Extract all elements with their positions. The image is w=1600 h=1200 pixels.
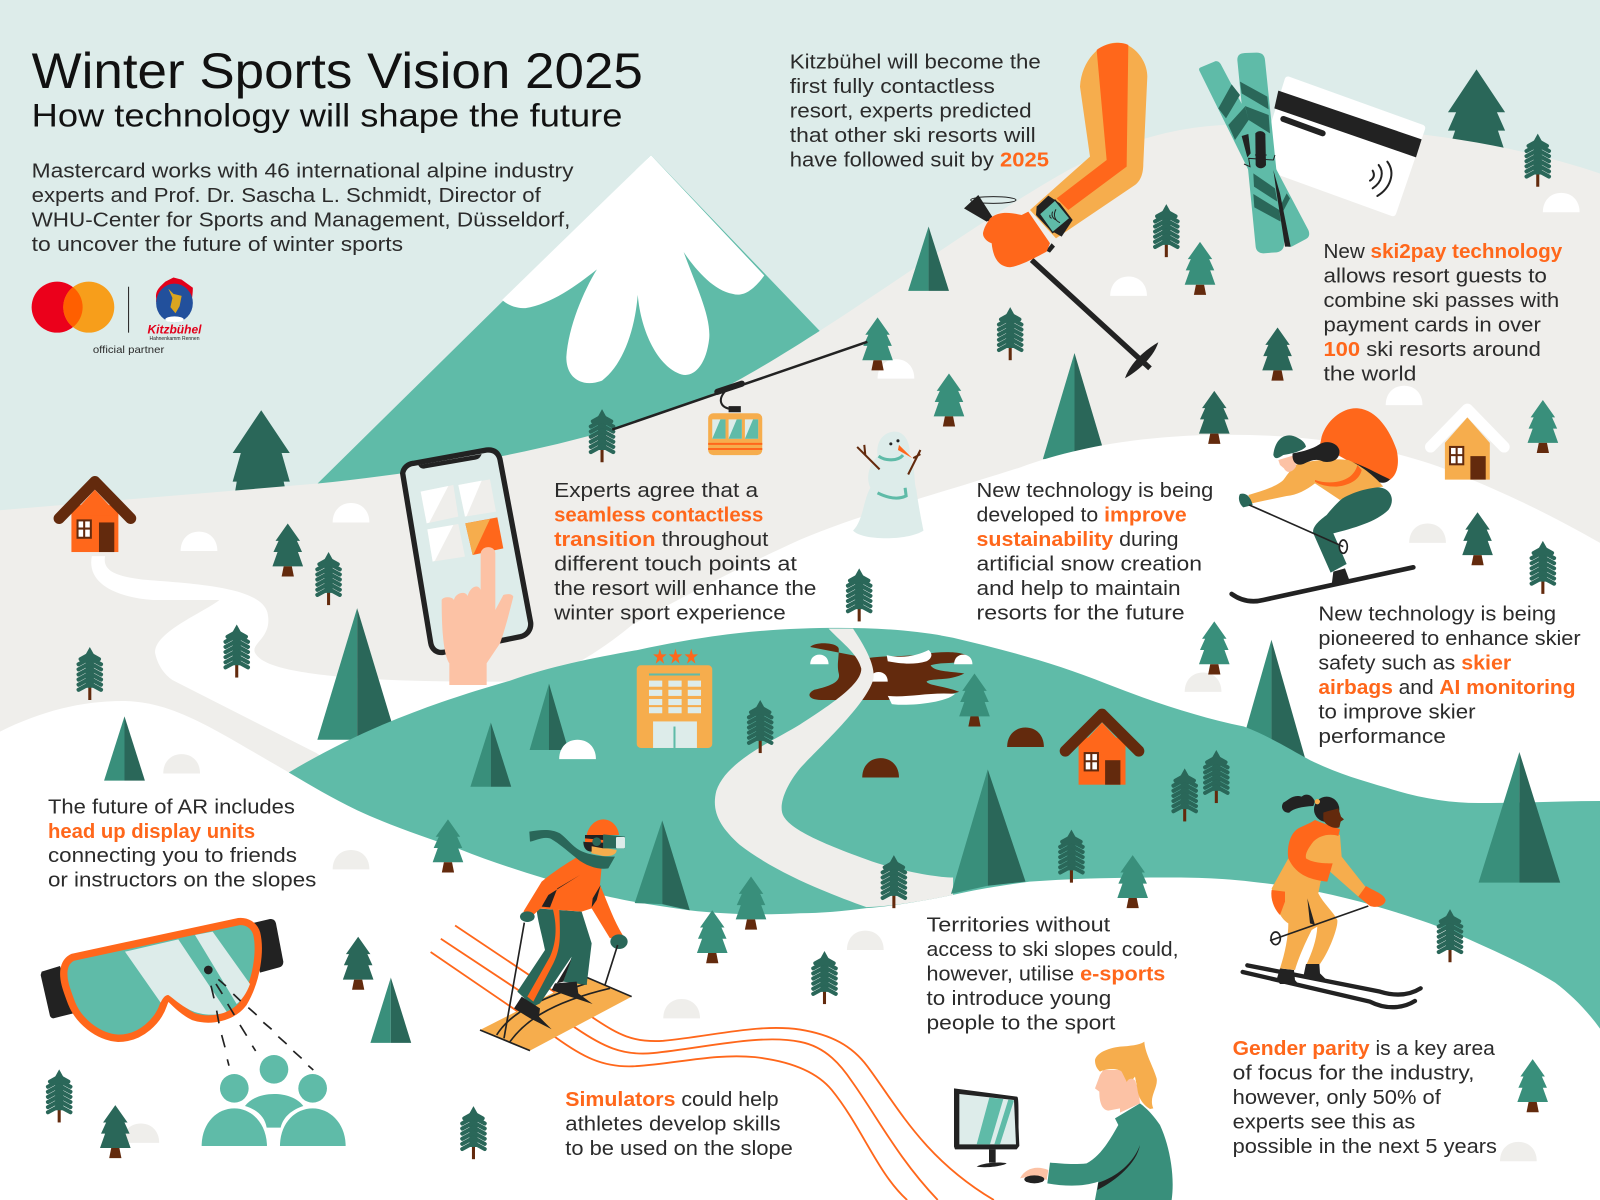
pine tree: [79, 647, 101, 700]
fir tree: [697, 910, 728, 963]
crossed skis: [1199, 53, 1309, 253]
snow mound: [878, 359, 914, 379]
text: e-sports: [927, 915, 1179, 1035]
text: simulators: Simulators could help: [565, 1089, 779, 1111]
large dark fir behind hill: [233, 410, 290, 500]
pine tree: [883, 855, 905, 908]
AR goggles: [41, 919, 313, 1070]
cone tree right of meadow: [1234, 640, 1309, 772]
text: ski2pay: New ski2pay technology: [1323, 241, 1563, 263]
cone tree lower meadow: [635, 820, 690, 910]
fir tree: [1517, 1059, 1548, 1112]
pine tree: [813, 951, 836, 1004]
skier on simulator: [480, 819, 632, 1051]
text: seamless contactless: winter sport experience: [553, 602, 786, 624]
brown mound: [1007, 728, 1044, 747]
phone with hand: [403, 450, 531, 685]
intro text: to uncover the future of winter sports: [32, 234, 403, 256]
mountain snowcap: [502, 155, 764, 383]
grey mound: [847, 931, 884, 950]
phone notch: [418, 454, 482, 469]
fir tree: [1262, 328, 1293, 381]
text: skier safety: New technology is being: [1318, 603, 1556, 625]
text: gender parity: however, only 50% of: [1233, 1087, 1441, 1109]
grey mound: [1185, 672, 1221, 692]
text: sustainability: and help to maintain: [977, 578, 1181, 600]
kitzbuhel logo: Kitzbühel: [147, 323, 202, 337]
group of people icon: [202, 1055, 346, 1146]
text: sustainability: resorts for the future: [977, 602, 1185, 624]
fir tree: [100, 1105, 131, 1158]
text: simulators: athletes develop skills: [565, 1114, 781, 1136]
text: seamless contactless: different touch points at: [554, 553, 797, 575]
app tiles: [421, 479, 503, 562]
fir tree: [343, 937, 373, 990]
pine tree: [1155, 204, 1178, 257]
text: skier safety: [1318, 603, 1581, 748]
cone tree on upper hill: [1043, 353, 1106, 459]
text: e-sports: people to the sport: [927, 1013, 1116, 1035]
text: augmented reality: The future of AR includes: [48, 796, 295, 818]
text: contactless resort: that other ski resorts will: [790, 125, 1036, 147]
text: e-sports: to introduce young: [927, 988, 1111, 1010]
mountain: [316, 155, 820, 490]
text: contactless resort: have followed suit by 2025: [790, 149, 1049, 171]
text: skier safety: pioneered to enhance skier: [1318, 628, 1581, 650]
text: contactless resort: first fully contactless: [790, 76, 995, 98]
pine tree: [1173, 768, 1196, 821]
text: skier safety: safety such as skier: [1318, 652, 1511, 674]
text: e-sports: access to ski slopes could,: [927, 939, 1179, 961]
text: seamless contactless: transition throughout: [554, 529, 769, 551]
snow mound: [333, 503, 369, 522]
pine tree: [1205, 750, 1228, 803]
text: contactless resort: [790, 51, 1049, 171]
text: skier safety: airbags and AI monitoring: [1318, 677, 1576, 699]
pine tree: [749, 700, 771, 753]
pine tree: [48, 1069, 70, 1122]
text: e-sports: however, utilise e-sports: [927, 964, 1165, 986]
cone tree centre meadow: [951, 769, 1026, 894]
house: orange left: [59, 482, 131, 552]
pine tree: [462, 1106, 485, 1159]
text: ski2pay: payment cards in over: [1323, 315, 1541, 337]
text: sustainability: sustainability during: [977, 529, 1179, 551]
fir tree: [1199, 391, 1230, 444]
pine tree: [591, 409, 613, 462]
cone tree right meadow: [1479, 752, 1560, 883]
house: orange meadow: [1065, 714, 1139, 785]
kitzbuhel logo: Hahnenkamm Rennen: [149, 336, 200, 342]
fir tree: [1462, 512, 1493, 565]
text: augmented reality: connecting you to friends: [48, 845, 297, 867]
text: contactless resort: resort, experts predicted: [790, 100, 1032, 122]
snow mound: [559, 740, 596, 759]
person at computer: [954, 1042, 1173, 1200]
pine tree: [226, 624, 248, 678]
intro text: WHU-Center for Sports and Management, Düsseldorf,: [32, 210, 570, 232]
cone tree left of meadow: [317, 608, 397, 740]
fir tree: [272, 523, 303, 577]
grey mound: [1409, 523, 1446, 543]
snow mound: [1543, 193, 1580, 212]
pine tree: [1439, 909, 1461, 962]
text: gender parity: Gender parity is a key area: [1233, 1038, 1496, 1060]
skier with airbag: [1232, 408, 1413, 601]
text: augmented reality: or instructors on the slopes: [48, 870, 316, 892]
subtitle: How technology will shape the future: [32, 97, 622, 134]
kitzbuhel logo: [147, 278, 202, 342]
text: skier safety: performance: [1318, 726, 1446, 748]
fir tree: [934, 373, 964, 427]
text: gender parity: of focus for the industry,: [1233, 1063, 1474, 1085]
cone tree in meadow: [530, 684, 568, 750]
text: augmented reality: head up display units: [48, 821, 255, 843]
text: gender parity: possible in the next 5 years: [1233, 1136, 1497, 1158]
pine tree: [1060, 830, 1083, 883]
snow mound: [181, 532, 217, 551]
fir tree: [1528, 400, 1558, 453]
female skier: [1243, 795, 1421, 1007]
cone tree near top arm: [908, 227, 949, 291]
orange ski tracks: [431, 926, 994, 1200]
grey mound: [1500, 1142, 1537, 1161]
text: seamless contactless: the resort will enhance the: [554, 578, 816, 600]
intro text: [32, 161, 574, 256]
fir tree: [1117, 855, 1148, 908]
cone tree lower left: [104, 716, 145, 781]
hotel: [637, 646, 712, 748]
intro text: Mastercard works with 46 international alpine industry: [32, 161, 574, 183]
winding ski road: [715, 629, 953, 907]
text: sustainability: New technology is being: [977, 480, 1213, 502]
mastercard logo: [32, 282, 114, 333]
large dark fir top right: [1448, 69, 1505, 149]
text: seamless contactless: Experts agree that a: [554, 480, 759, 502]
pine tree: [1527, 134, 1549, 187]
text: ski2pay: allows resort guests to: [1323, 266, 1547, 288]
brown mound: [862, 758, 899, 778]
teal meadow: [289, 628, 1600, 1029]
grey snow hill: [0, 124, 1600, 796]
text: ski2pay: [1323, 241, 1563, 386]
logos: official partner: [93, 345, 165, 356]
cone tree bottom: [370, 978, 411, 1043]
text: contactless resort: Kitzbühel will become the: [790, 51, 1041, 73]
fir tree: [736, 877, 766, 930]
pine tree: [1532, 541, 1554, 594]
pine tree: [999, 307, 1021, 360]
fir tree: [1185, 242, 1215, 295]
arm with smartwatch and ski pole: [964, 43, 1158, 378]
text: augmented reality: [48, 796, 316, 892]
text: seamless contactless: [553, 480, 816, 624]
grey mound: [163, 754, 200, 773]
brown mud patch: [809, 643, 972, 705]
fir tree: [959, 673, 990, 727]
pine tree: [848, 568, 870, 621]
text: sustainability: artificial snow creation: [977, 553, 1202, 575]
grey mound: [663, 999, 700, 1018]
contactless card: [1257, 77, 1425, 216]
text: gender parity: experts see this as: [1233, 1112, 1415, 1134]
smartwatch: [1036, 196, 1073, 237]
house: yellow with snowy roof: [1431, 409, 1504, 480]
white hill and road: [91, 435, 1600, 816]
hand: [442, 547, 513, 685]
text: ski2pay: combine ski passes with: [1323, 290, 1559, 312]
pine tree: [317, 552, 340, 605]
text: sustainability: developed to improve: [977, 504, 1187, 526]
gondola lift: [612, 342, 867, 455]
grey mound: [122, 1123, 159, 1143]
text: ski2pay: 100 ski resorts around: [1323, 339, 1541, 361]
text: simulators: to be used on the slope: [565, 1138, 793, 1160]
text: gender parity: [1233, 1038, 1497, 1158]
fir tree: [1199, 621, 1230, 674]
title: Winter Sports Vision 2025: [32, 43, 643, 99]
cone tree in meadow: [470, 722, 511, 787]
snowman: [853, 432, 923, 538]
fir tree: [862, 317, 893, 370]
intro text: experts and Prof. Dr. Sascha L. Schmidt, Director of: [32, 185, 541, 207]
hotel: ★★★: [652, 646, 699, 668]
text: skier safety: to improve skier: [1318, 701, 1476, 723]
text: e-sports: Territories without: [927, 915, 1111, 937]
text: sustainability: [977, 480, 1213, 624]
snow mound: [1110, 277, 1147, 296]
fir tree: [433, 819, 463, 872]
bottom white snowfield: [0, 701, 1600, 1200]
logos: [32, 278, 202, 356]
text: simulators: [565, 1089, 793, 1160]
text: ski2pay: the world: [1323, 364, 1416, 386]
grey mound: [333, 850, 369, 869]
snow mound: [1386, 386, 1422, 405]
text: seamless contactless: seamless contactless: [554, 504, 763, 526]
